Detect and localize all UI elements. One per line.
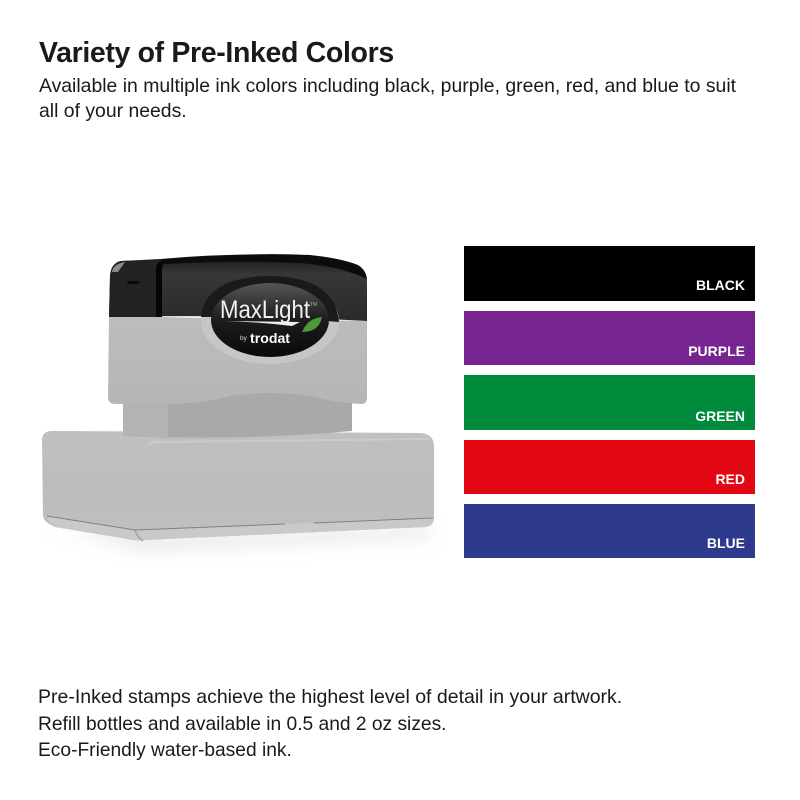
intro text: all of your needs. — [39, 100, 187, 122]
logo text: MaxLight — [220, 296, 310, 324]
swatch: purple: PURPLE — [688, 343, 745, 359]
footer text: Eco-Friendly water-based ink. — [38, 740, 292, 761]
footer text: Refill bottles and available in 0.5 and 2 oz sizes. — [38, 714, 447, 734]
shadow — [50, 525, 430, 550]
logo leaf — [302, 317, 322, 332]
footer text: Pre-Inked stamps achieve the highest level of detail in your artwork. — [38, 686, 622, 708]
swatch: green: GREEN — [695, 408, 745, 424]
base lower lip — [47, 516, 433, 540]
logo oval rim — [201, 278, 339, 364]
swatch: red: RED — [715, 471, 745, 487]
cap — [109, 255, 367, 321]
swatch: black — [464, 246, 755, 301]
intro text: Available in multiple ink colors including black, purple, green, red, and blue to suit — [39, 75, 736, 97]
intro text — [39, 75, 736, 122]
logo oval — [211, 283, 329, 357]
stamp illustration: by — [240, 335, 248, 342]
swatch: blue: BLUE — [707, 535, 745, 551]
base top ridge — [147, 438, 430, 446]
neck — [123, 388, 352, 438]
base — [42, 431, 434, 540]
stamp illustration: trodat — [250, 330, 290, 346]
swatch: red — [464, 440, 755, 494]
swatch: black: BLACK — [696, 277, 745, 293]
swatch: blue — [464, 504, 755, 558]
swatch: purple — [464, 311, 755, 365]
body — [108, 316, 367, 404]
base bottom lines — [47, 516, 433, 530]
title: Variety of Pre-Inked Colors — [39, 37, 394, 69]
footer text — [38, 686, 622, 761]
stamp illustration: TM — [310, 302, 317, 308]
swatch: green — [464, 375, 755, 430]
